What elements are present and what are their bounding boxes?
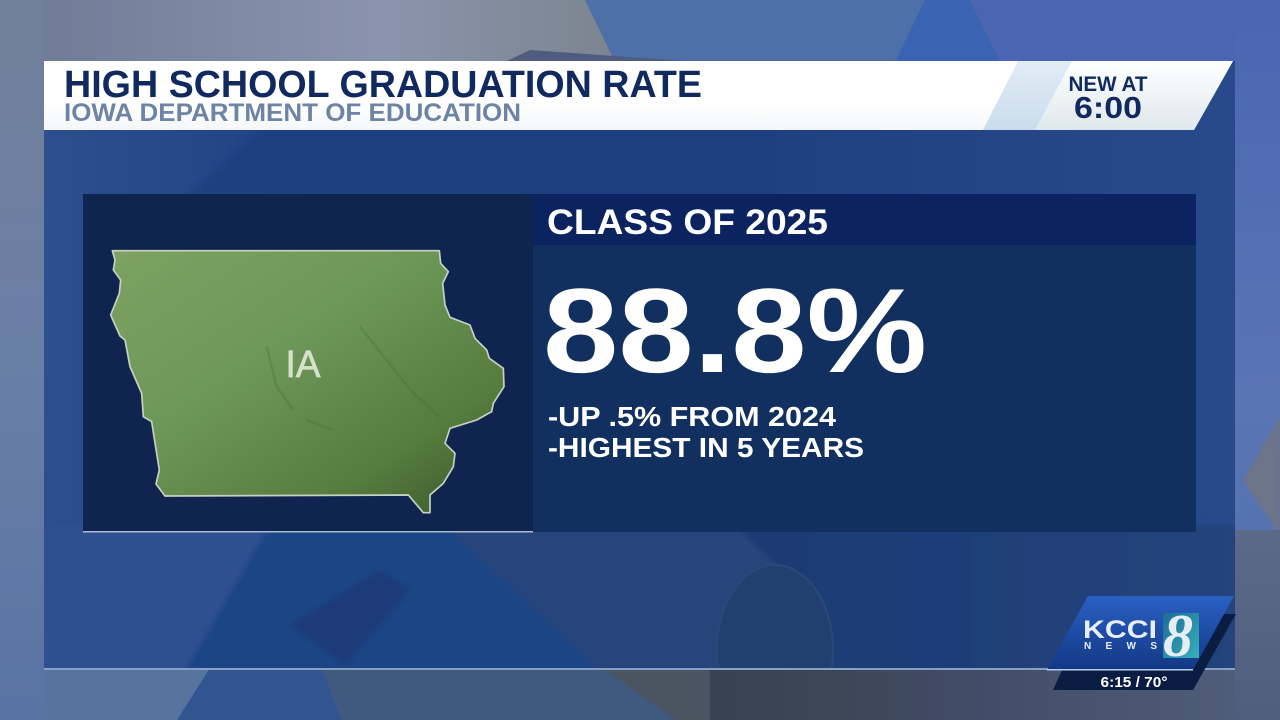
big percentage: 88.8% xyxy=(543,264,927,398)
bullet points xyxy=(548,401,864,463)
state label: IA xyxy=(286,344,321,386)
map panel xyxy=(83,194,533,532)
class heading bar: CLASS OF 2025 xyxy=(547,203,828,242)
badge: new at 6:00 xyxy=(1068,73,1148,125)
bullet points: -HIGHEST IN 5 YEARS xyxy=(548,432,864,463)
stats panel xyxy=(533,194,1196,532)
time and temperature: 6:15 / 70° xyxy=(1100,674,1168,691)
iowa map xyxy=(111,251,504,513)
badge: new at 6:00: NEW AT xyxy=(1068,73,1148,96)
subtitle: IOWA DEPARTMENT OF EDUCATION xyxy=(64,99,521,127)
logo eight: 8 xyxy=(1163,603,1193,669)
station logo xyxy=(1047,596,1236,691)
logo wordmark: KCCI xyxy=(1083,616,1157,644)
bullet points: -UP .5% FROM 2024 xyxy=(548,401,836,432)
lower background strip xyxy=(44,668,1235,720)
station logo: NEWS xyxy=(1084,641,1157,652)
class heading bar xyxy=(533,194,1196,245)
main blue panel xyxy=(44,61,1235,668)
badge: new at 6:00: 6:00 xyxy=(1074,90,1142,125)
title bar xyxy=(44,61,1233,130)
panel bottom rule xyxy=(44,668,1235,670)
title: HIGH SCHOOL GRADUATION RATE xyxy=(64,64,702,106)
